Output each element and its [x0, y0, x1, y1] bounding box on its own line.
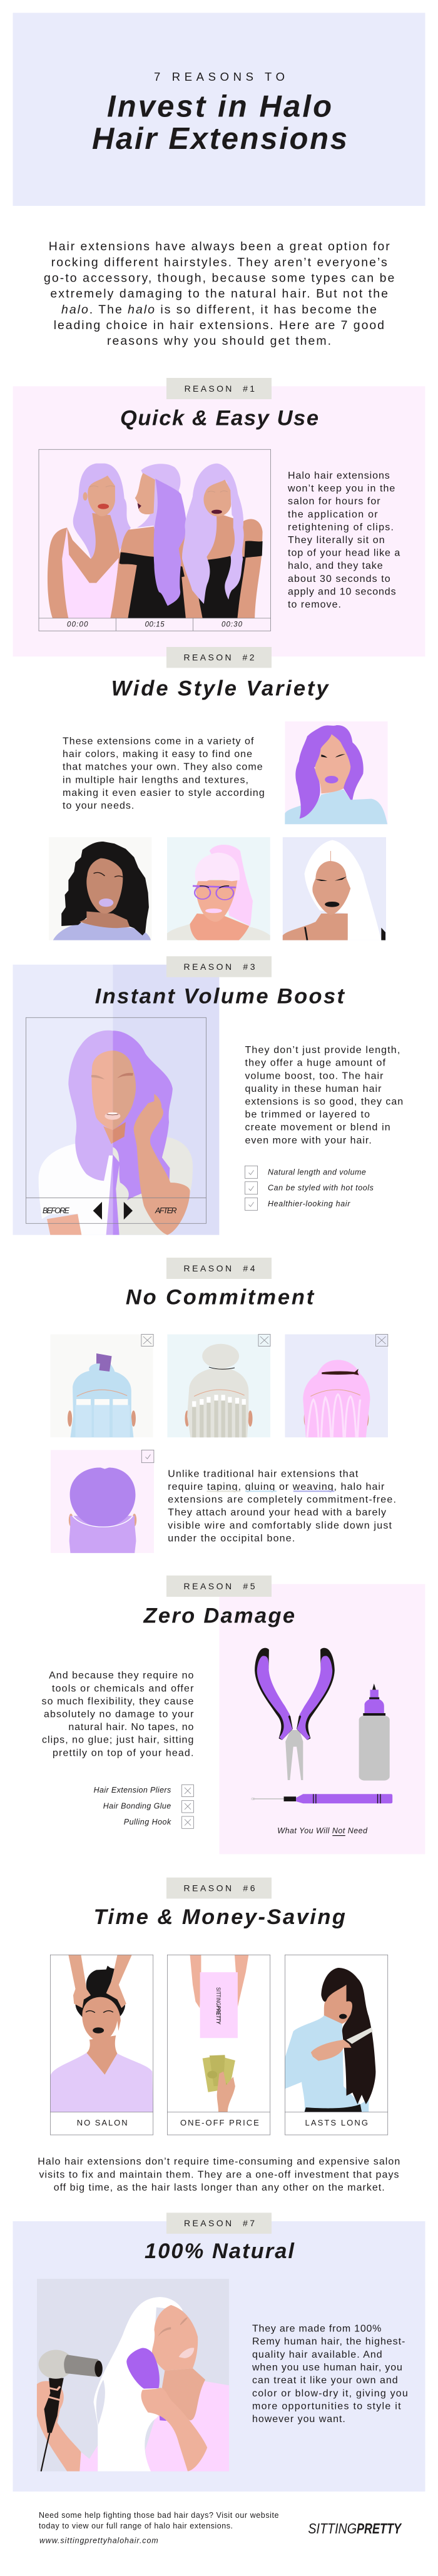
timer frame: 00:00 — [67, 621, 88, 628]
reason 3 tag: REASON #3 — [184, 962, 255, 972]
reason 6 tag: REASON #6 — [184, 1883, 255, 1893]
reason 5 body text: tools or chemicals and offer — [52, 1683, 194, 1694]
reason 7 tag — [166, 2212, 272, 2234]
reason 1 body text: retightening of clips. — [288, 522, 394, 532]
footer call to action: Need some help fighting those bad hair days? Visit our website — [39, 2511, 279, 2520]
hero panel — [13, 13, 425, 206]
reason 5 tag: REASON #5 — [184, 1581, 255, 1591]
reason 1 body text: halo, and they take — [288, 561, 383, 571]
reason 7 body text: color or blow-dry it, giving you — [252, 2388, 408, 2399]
reason 2 tag — [166, 647, 272, 668]
portrait: pink ponytail with glasses — [167, 837, 270, 940]
reason 7 body text — [252, 2324, 408, 2425]
logo: SITTING — [308, 2520, 357, 2537]
reason 3 body text: they offer a huge amount of — [245, 1058, 386, 1069]
checklist: Can be styled with hot tools — [268, 1184, 374, 1193]
footer call to action: today to view our full range of halo hair extensions. — [39, 2522, 233, 2530]
title: Invest in Halo — [107, 90, 332, 124]
reason 1 body text: apply and 10 seconds — [288, 586, 396, 597]
reason 1 body text — [287, 471, 400, 610]
intro text — [44, 240, 394, 348]
reason 7 body text: They are made from 100% — [252, 2324, 381, 2334]
checklist: Healthier-looking hair — [268, 1199, 350, 1208]
title — [92, 90, 347, 156]
timer frame: 00:30 — [222, 621, 243, 628]
reason 5 body text: absolutely no damage to your — [44, 1709, 194, 1719]
illustration: tools — [252, 1648, 392, 1803]
panel: reason 5 zero damage — [41, 1576, 425, 1854]
website link: www.sittingprettyhalohair.com — [39, 2537, 158, 2545]
logo — [308, 2520, 402, 2537]
before half background — [13, 965, 113, 1235]
reason 3 body text: extensions is so good, they can — [245, 1096, 403, 1107]
not needed list — [94, 1784, 193, 1828]
reason 3 body text: volume boost, too. The hair — [245, 1071, 384, 1081]
title: Hair Extensions — [92, 122, 347, 156]
timer frame — [39, 449, 271, 631]
reason 4 heading: No Commitment — [126, 1285, 315, 1309]
not needed list: Hair Extension Pliers — [94, 1786, 171, 1795]
not needed list: Pulling Hook — [124, 1818, 171, 1826]
reason 3 heading: Instant Volume Boost — [95, 984, 345, 1008]
reason 2 body text: that matches your own. They also come — [63, 762, 263, 773]
panel: reason 4 no commitment — [50, 1258, 396, 1553]
reason 3 body text: They don’t just provide length, — [245, 1045, 400, 1056]
timer frame: 00:15 — [145, 621, 165, 628]
reason 1 tag — [166, 378, 272, 399]
intro text: reasons why you should get them. — [107, 334, 331, 348]
intro text: Hair extensions have always been a great option for — [49, 240, 390, 253]
checklist — [245, 1166, 374, 1210]
portrait: white hair — [283, 837, 386, 940]
reason 5 body text: And because they require no — [49, 1671, 193, 1681]
reason 1 heading: Quick & Easy Use — [120, 406, 318, 430]
card: taping — [50, 1334, 153, 1437]
reason 6 body text: off big time, as the hair lasts longer than any other on the market. — [54, 2182, 385, 2193]
intro text: rocking different hairstyles. They aren’t everyone’s — [51, 255, 387, 269]
reason 6 tag — [166, 1878, 272, 1898]
icons: x boxes — [141, 1334, 388, 1347]
before after frame — [26, 1017, 206, 1223]
reason 5 body text: so much flexibility, they cause — [41, 1696, 193, 1707]
reason 6 body text: Halo hair extensions don’t require time-consuming and expensive salon — [38, 2157, 400, 2167]
reason 4 body text: Unlike traditional hair extensions that — [168, 1469, 359, 1479]
reason 1 tag: REASON #1 — [185, 384, 255, 394]
logo: PRETTY — [357, 2520, 402, 2537]
icon: right arrow — [124, 1202, 133, 1219]
footer call to action — [39, 2511, 279, 2545]
reason 3 body text: be trimmed or layered to — [245, 1109, 370, 1120]
word underlines — [206, 1490, 334, 1492]
reason 3 body text — [245, 1045, 403, 1146]
reason 7 body text: however you want. — [252, 2414, 345, 2425]
panel: reason 6 time and money saving — [38, 1878, 400, 2193]
illustration: before and after woman — [39, 1031, 193, 1235]
reason 3 tag — [166, 956, 272, 977]
intro text: halo. The halo is so different, it has become the — [61, 303, 377, 317]
reason 1 body text: to remove. — [288, 599, 341, 610]
reason 2 body text — [63, 736, 265, 812]
reason 6 heading: Time & Money-Saving — [94, 1905, 345, 1929]
card: one-off price: ONE-OFF PRICE — [180, 2118, 259, 2127]
reason 5 body text — [41, 1671, 194, 1758]
card: no salon: NO SALON — [77, 2118, 128, 2127]
reason 2 body text: hair colors, making it easy to find one — [63, 749, 252, 760]
reason 1 body text: Halo hair extensions — [288, 471, 390, 481]
intro text: extremely damaging to the natural hair. But not the — [50, 287, 388, 301]
after half background — [113, 965, 219, 1235]
icon: glue bottle — [359, 1684, 390, 1781]
after label: AFTER — [155, 1206, 176, 1215]
reason 1 body text: the application or — [288, 509, 378, 520]
panel: reason 3 instant volume boost — [13, 956, 403, 1235]
reason 4 body text: extensions are completely commitment-free. — [168, 1495, 396, 1505]
reason 7 body text: Remy human hair, the highest- — [252, 2336, 405, 2347]
card: no salon — [50, 1955, 153, 2135]
reason 4 body text: visible wire and comfortably slide down just — [168, 1520, 392, 1531]
reason 4 body text — [168, 1469, 396, 1544]
panel: reason 1 quick and easy use — [13, 378, 425, 656]
reason 3 body text: create movement or blend in — [245, 1123, 390, 1133]
reason 1 body text: top of your head like a — [288, 548, 400, 559]
reason 5 body text: natural hair. No tapes, no — [68, 1722, 193, 1733]
icon: check box — [141, 1450, 154, 1463]
card: one-off price — [167, 1955, 270, 2135]
card: halo — [51, 1450, 154, 1553]
card: weaving — [285, 1334, 388, 1437]
reason 7 body text: can treat it like your own and — [252, 2375, 398, 2386]
portrait: black curly hair — [49, 837, 151, 940]
portrait: purple hair — [285, 721, 388, 824]
eyebrow text: 7 REASONS TO — [154, 70, 285, 83]
reason 7 body text: when you use human hair, you — [252, 2363, 402, 2373]
reason 5 tag — [166, 1576, 272, 1597]
card: one-off price: SITTINGPRETTY — [215, 1987, 222, 2025]
icon: pulling hook — [252, 1794, 392, 1803]
reason 2 body text: in multiple hair lengths and textures, — [63, 775, 248, 785]
reason 1 body text: won’t keep you in the — [287, 484, 395, 494]
reason 2 tag: REASON #2 — [184, 652, 255, 662]
intro text: go-to accessory, though, because some types can be — [44, 272, 394, 285]
reason 2 body text: making it even easier to style according — [63, 788, 265, 798]
icon: left arrow — [93, 1202, 102, 1219]
reason 2 body text: to your needs. — [63, 801, 134, 812]
reason 4 tag — [166, 1258, 272, 1279]
tools background — [219, 1584, 425, 1854]
reason 4 tag: REASON #4 — [184, 1263, 255, 1273]
reason 5 heading: Zero Damage — [143, 1604, 295, 1627]
reason 1 body text: about 30 seconds to — [288, 574, 390, 584]
tools caption: What You Will Not Need — [277, 1826, 368, 1835]
reason 4 body text: under the occipital bone. — [168, 1533, 295, 1544]
reason 7 tag: REASON #7 — [184, 2218, 255, 2228]
icon: pliers — [255, 1648, 335, 1780]
reason 3 body text: quality in these human hair — [245, 1084, 382, 1094]
checklist: Natural length and volume — [268, 1168, 366, 1176]
card: lasts long: LASTS LONG — [305, 2118, 368, 2127]
reason 3 body text: even more with your hair. — [245, 1135, 372, 1146]
reason 5 body text: clips, no glue; just hair, sitting — [42, 1735, 193, 1746]
card: bonding — [167, 1334, 270, 1437]
panel: reason 7 100% natural — [13, 2212, 425, 2492]
reason 1 body text: salon for hours for — [288, 496, 380, 507]
reason 5 body text: prettily on top of your head. — [53, 1748, 193, 1758]
reason 6 body text: visits to fix and maintain them. They are a one-off investment that pays — [39, 2169, 399, 2180]
reason 7 body text: more opportunities to style it — [252, 2401, 401, 2411]
reason 7 body text: quality hair available. And — [252, 2349, 382, 2360]
panel: reason 2 wide style variety — [49, 647, 388, 940]
reason 7 heading: 100% Natural — [145, 2239, 295, 2263]
intro text: leading choice in hair extensions. Here are 7 good — [54, 318, 384, 332]
reason 6 body text — [38, 2157, 400, 2193]
not needed list: Hair Bonding Glue — [103, 1802, 171, 1811]
reason 4 body text: They attach around your head with a barely — [168, 1507, 386, 1518]
reason 1 body text: They literally sit on — [288, 535, 385, 546]
reason 2 heading: Wide Style Variety — [111, 677, 329, 701]
before label: BEFORE — [43, 1206, 70, 1215]
reason 2 body text: These extensions come in a variety of — [63, 736, 254, 746]
illustration: three women with lavender hair — [48, 464, 263, 618]
illustration: woman drying white hair — [37, 2279, 229, 2472]
reason 4 body text: require taping, gluing or weaving, halo hair — [168, 1482, 385, 1492]
card: lasts long — [285, 1955, 388, 2135]
